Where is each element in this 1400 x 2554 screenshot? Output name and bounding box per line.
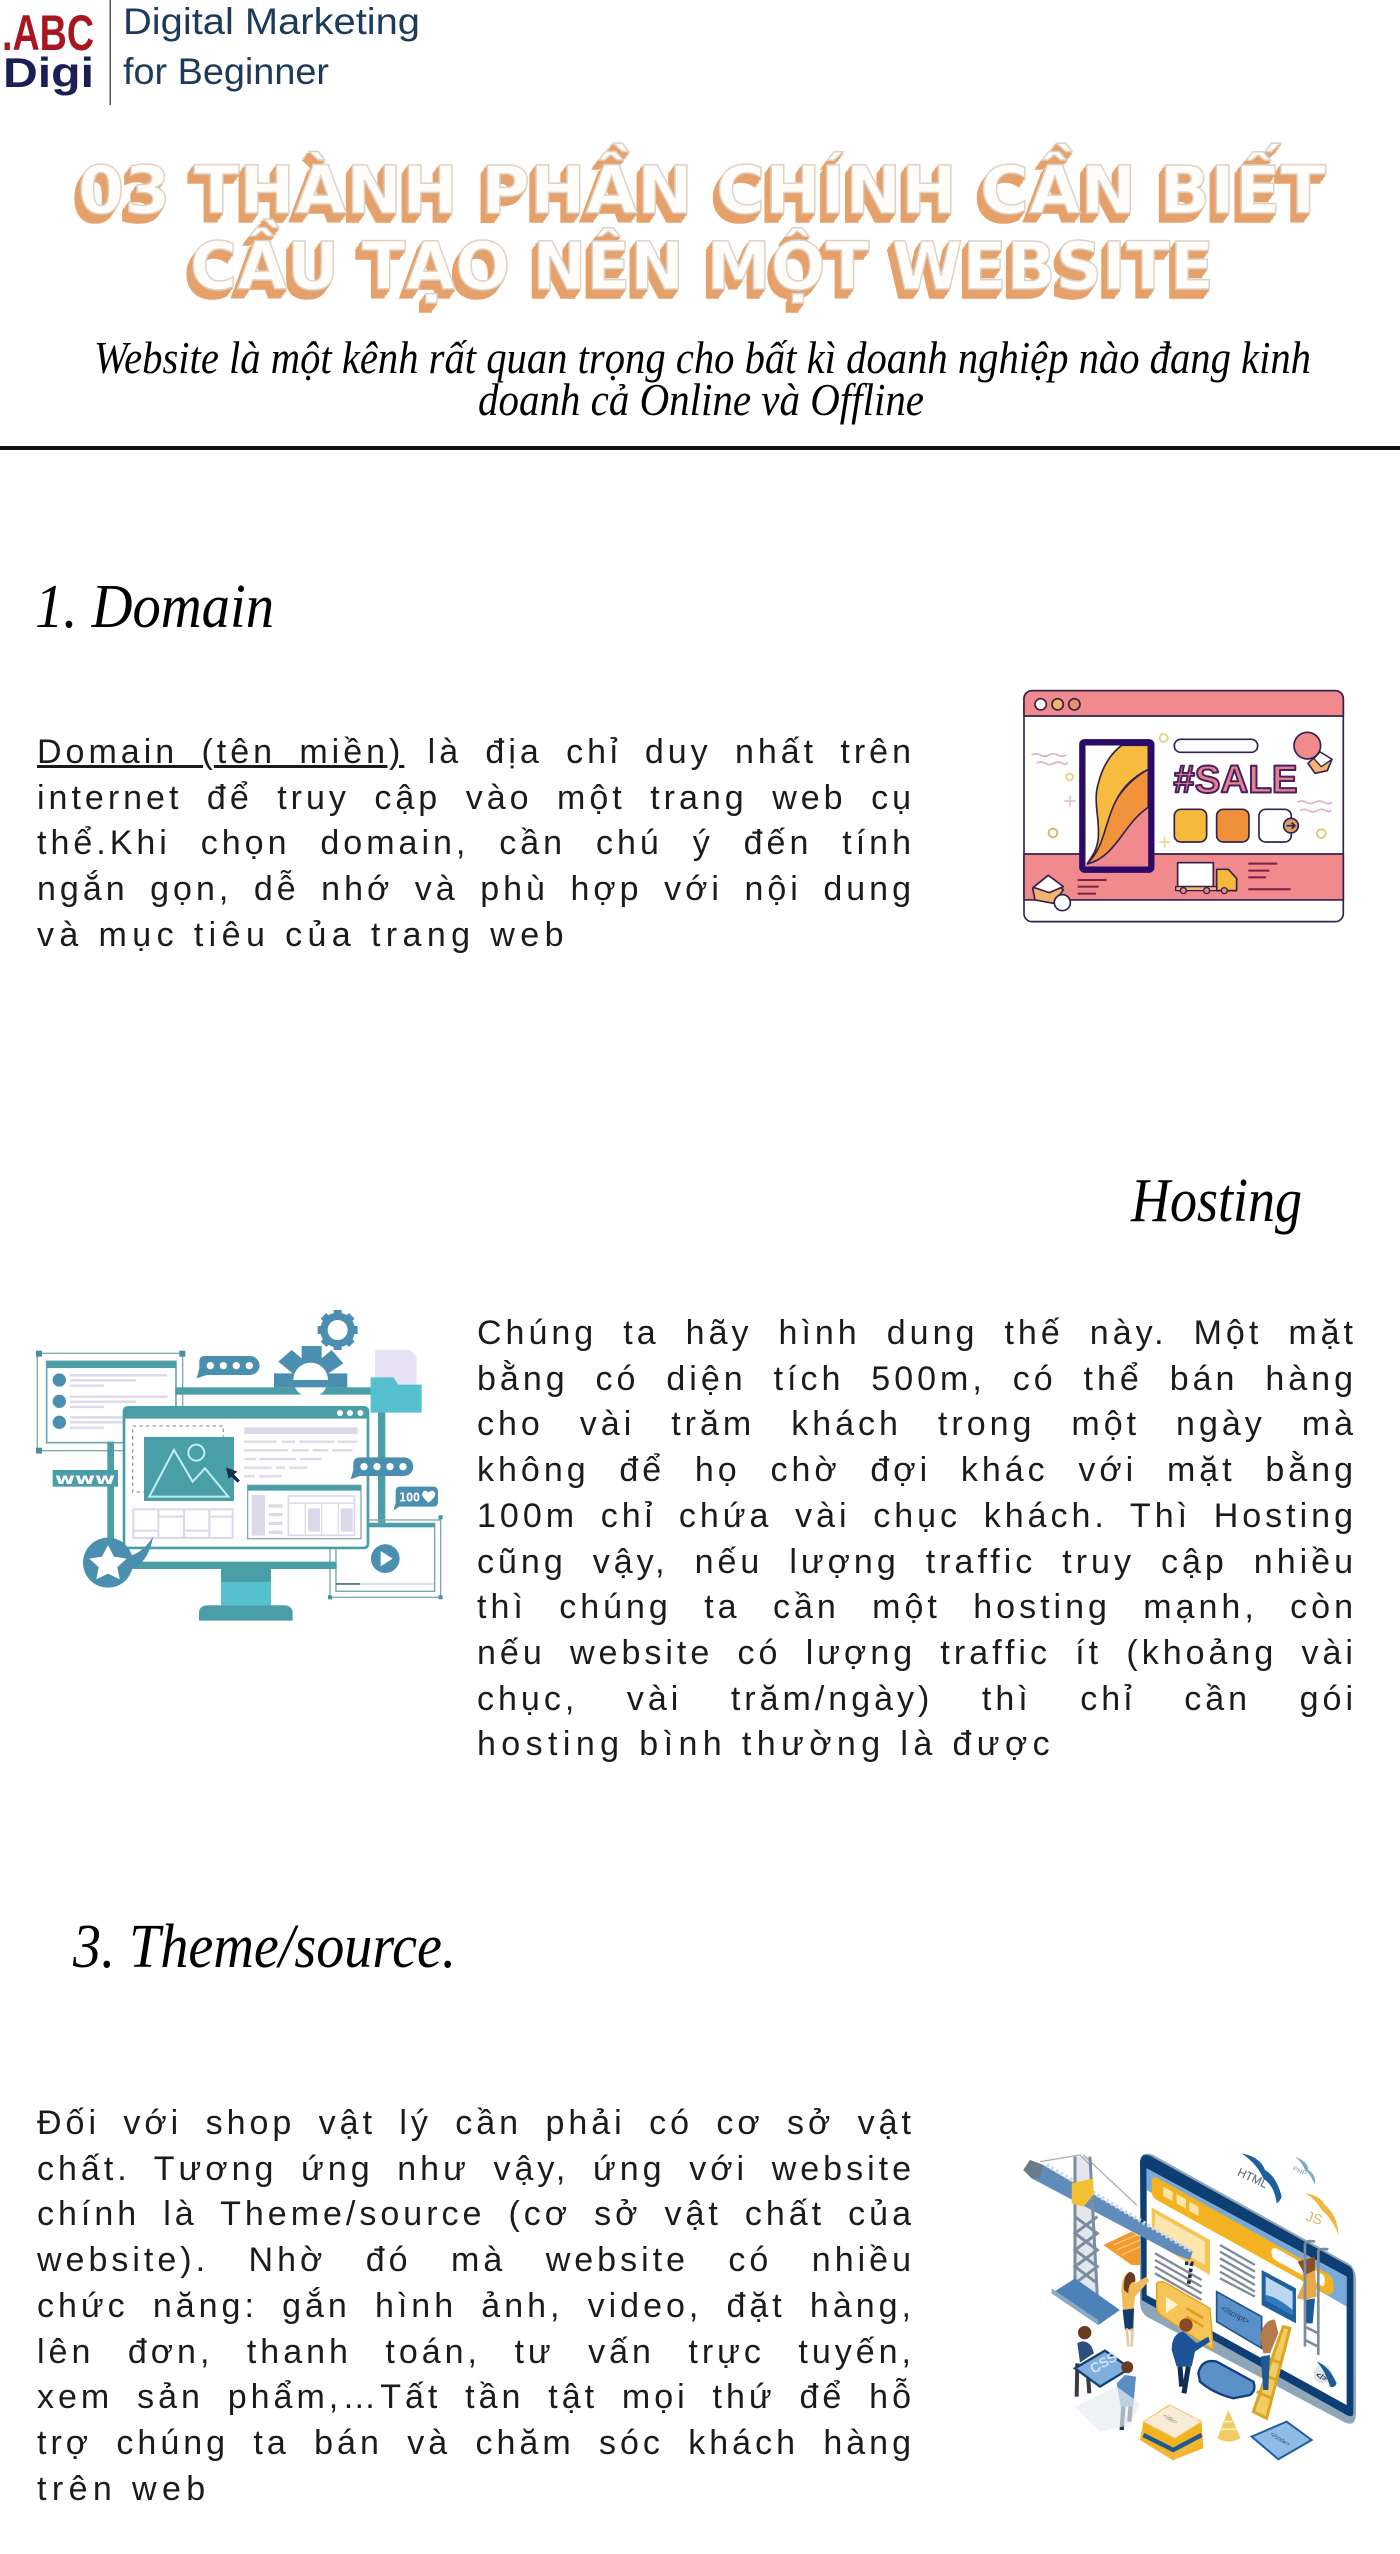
text block: hosting description: cũng vậy, nếu lượng traffic truy cập nhiều [477, 1543, 1357, 1581]
text block: theme description: chính là Theme/source (cơ sở vật chất của [37, 2195, 915, 2233]
icon: website construction illustration: HTML [1235, 2165, 1270, 2191]
logo [2, 0, 420, 105]
text block: hosting description: hosting bình thường là được [477, 1725, 1055, 1763]
icon: website monitor illustration: 100 [399, 1491, 420, 1505]
text block: domain description: internet để truy cập vào một trang web cụ [37, 779, 915, 817]
text block: hosting description: Chúng ta hãy hình dung thế này. Một mặt [477, 1314, 1357, 1352]
subtitle [94, 332, 1311, 425]
title [78, 143, 1326, 305]
text block: hosting description [477, 1314, 1357, 1763]
icon: website construction illustration: </> [1314, 2370, 1329, 2383]
text block: theme description [37, 2104, 915, 2508]
text block: hosting description: nếu website có lượng traffic ít (khoảng vài [477, 1634, 1357, 1672]
heading: Hosting: Hosting [1130, 1167, 1302, 1235]
text block: hosting description: cho vài trăm khách trong một ngày mà [477, 1405, 1357, 1443]
text block: hosting description: bằng có diện tích 500m, có thể bán hàng [477, 1360, 1357, 1398]
text block: domain description [37, 733, 915, 954]
text block: hosting description: 100m chỉ chứa vài chục khách. Thì Hosting [477, 1497, 1357, 1535]
text block: domain description: thể.Khi chọn domain, cần chú ý đến tính [37, 824, 915, 862]
subtitle: doanh cả Online và Offline [478, 374, 924, 425]
text block: theme description: trên web [37, 2470, 211, 2508]
text block: hosting description: chục, vài trăm/ngày) thì chỉ cần gói [477, 1680, 1357, 1718]
text block: theme description: chức năng: gắn hình ảnh, video, đặt hàng, [37, 2287, 915, 2325]
text block: hosting description: thì chúng ta cần một hosting mạnh, còn [477, 1588, 1357, 1626]
icon: sale website illustration [1024, 691, 1343, 922]
title: 03 THÀNH PHẦN CHÍNH CẦN BIẾT [78, 143, 1326, 229]
icon: website monitor illustration [36, 1310, 443, 1621]
logo mark: Digi: Digi [3, 49, 94, 96]
text block: theme description: trợ chúng ta bán và chăm sóc khách hàng [37, 2424, 915, 2462]
text block: theme description: Đối với shop vật lý cần phải có cơ sở vật [37, 2104, 915, 2142]
icon: website construction illustration: PHP [1291, 2165, 1308, 2178]
header divider [0, 446, 1400, 450]
text block: theme description: xem sản phẩm,…Tất tần tật mọi thứ để hỗ [37, 2378, 915, 2416]
icon: website monitor illustration: www [55, 1470, 115, 1488]
logo tagline line 2: for Beginner [123, 51, 329, 92]
text block: domain description: Domain (tên miền) là địa chỉ duy nhất trên [37, 733, 915, 771]
text block: hosting description: không để họ chờ đợi khác với mặt bằng [477, 1451, 1357, 1489]
text block: domain description: và mục tiêu của trang web [37, 916, 569, 954]
text block: theme description: website). Nhờ đó mà website có nhiều [37, 2241, 915, 2279]
title: CẦU TẠO NÊN MỘT WEBSITE [190, 219, 1214, 305]
icon: website construction illustration: JS [1304, 2208, 1325, 2228]
text block: domain description: ngắn gọn, dễ nhớ và phù hợp với nội dung [37, 870, 915, 908]
logo tagline line 1: Digital Marketing [123, 1, 420, 42]
icon: website construction illustration: </code> [1269, 2432, 1291, 2448]
heading: 1. Domain: 1. Domain [35, 573, 274, 641]
icon: website construction illustration: CSS [1087, 2348, 1120, 2377]
text block: theme description: chất. Tương ứng như vậy, ứng với website [37, 2150, 915, 2188]
icon: website construction illustration: </div> [1162, 2413, 1179, 2426]
logo mark: ABC: .ABC [2, 5, 94, 61]
heading: 3. Theme/source.: 3. Theme/source. [72, 1913, 456, 1981]
icon: sale website illustration: #SALE [1173, 757, 1298, 801]
text block: theme description: lên đơn, thanh toán, tư vấn trực tuyến, [37, 2333, 915, 2371]
icon: website construction illustration: </script> [1220, 2304, 1251, 2326]
icon: website construction illustration [1023, 2153, 1356, 2461]
